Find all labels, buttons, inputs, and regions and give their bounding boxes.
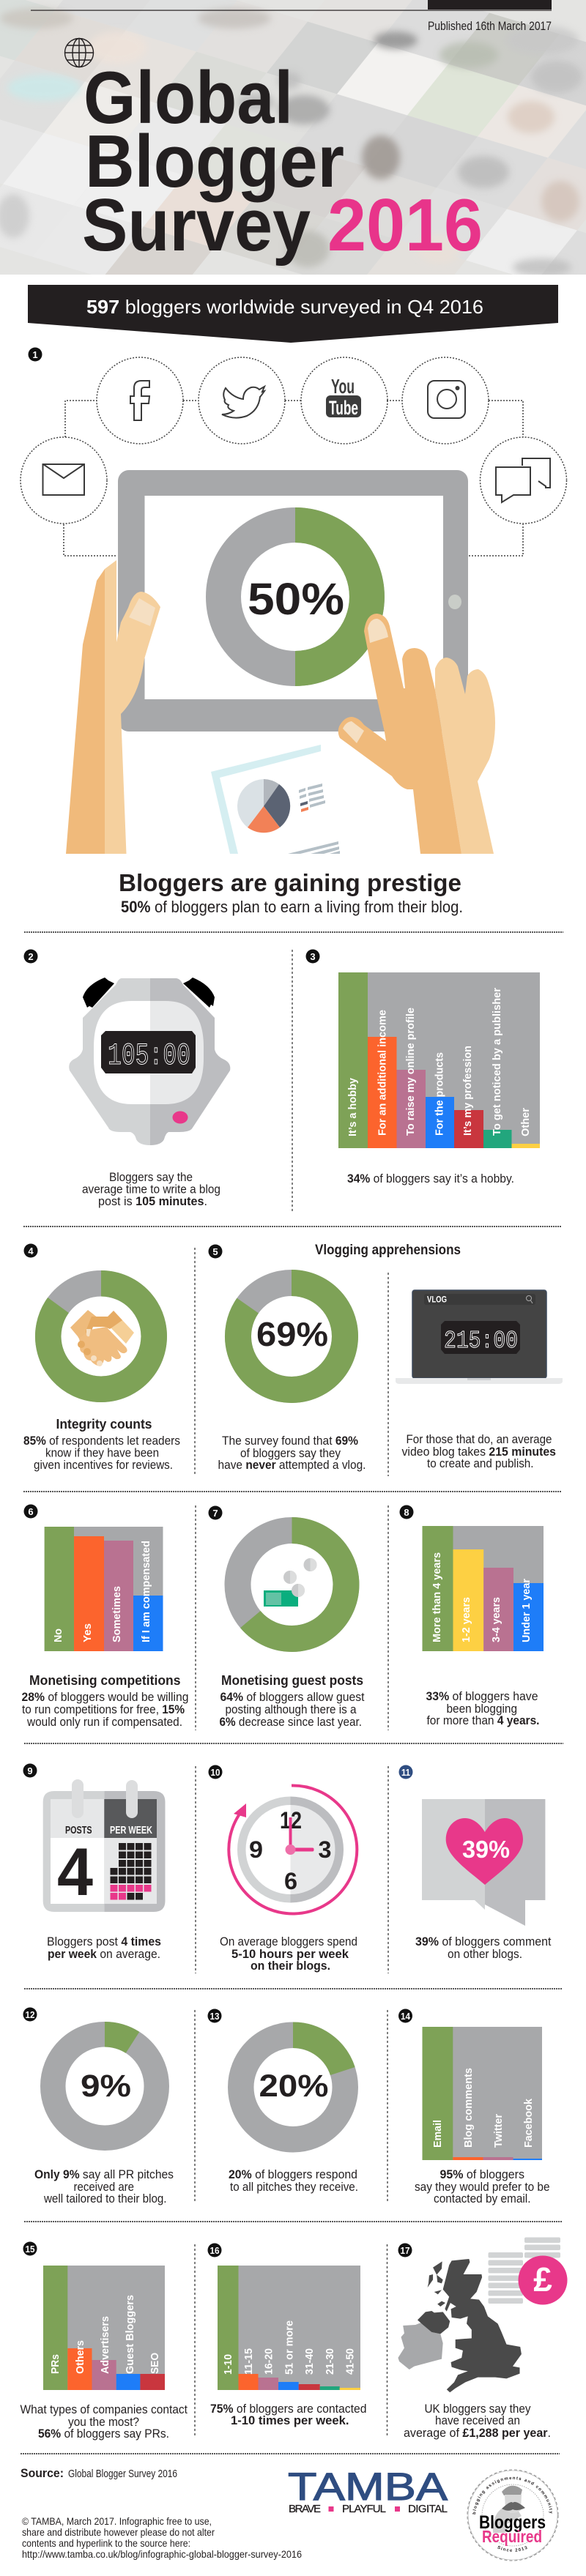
caption 5 [218, 1434, 366, 1472]
bar chart: competitions: No [53, 1628, 64, 1642]
number badge 12 [23, 2008, 37, 2021]
title [82, 57, 483, 267]
logo: Bloggers Required stamp [467, 2469, 558, 2561]
caption 13: to all pitches they receive. [230, 2181, 358, 2194]
bar chart: reasons [338, 972, 540, 1148]
panel 3: why bloggers blog [306, 949, 540, 1185]
number badge 17 [398, 2244, 412, 2257]
number badge 4: 4 [28, 1246, 34, 1257]
number badge 5 [208, 1245, 223, 1258]
icon: youtube [301, 357, 387, 444]
icon: calendar: 4 [57, 1835, 93, 1910]
bar chart: years: Under 1 year [521, 1579, 533, 1642]
sub-heading: 50% of bloggers plan to earn a living from their blog. [121, 898, 463, 916]
number badge 11: 11 [401, 1767, 410, 1778]
bar chart: competitions: Yes [82, 1623, 94, 1642]
caption 4: know if they have been [45, 1447, 159, 1460]
icon: speech bubble with heart: 39% [462, 1836, 510, 1863]
caption 14 [415, 2168, 549, 2205]
caption vlog time: video blog takes 215 minutes [401, 1445, 556, 1459]
number badge 4 [23, 1243, 38, 1258]
caption 10 [220, 1935, 357, 1973]
caption 16: 1-10 times per week. [231, 2414, 349, 2427]
donut chart: 50% [223, 525, 367, 669]
number badge 13: 13 [209, 2011, 220, 2022]
bar chart: reasons: To raise my online profile [405, 1008, 417, 1136]
icon: clock: 12 [280, 1807, 302, 1834]
bar chart: company types: Others [75, 2340, 86, 2374]
caption 3: 34% of bloggers say it’s a hobby. [347, 1172, 514, 1185]
panel 5: vlogging apprehensions [208, 1242, 563, 1472]
bar chart: years: More than 4 years [431, 1552, 443, 1642]
caption 8: for more than 4 years. [426, 1714, 539, 1727]
donut chart: 9%: 9% [81, 2069, 131, 2104]
panel 11: commenting [398, 1765, 552, 1961]
caption 17: have received an [435, 2414, 520, 2427]
bar chart: contact frequency: 51 or more [284, 2320, 296, 2375]
bar chart: reasons: For the products [434, 1052, 445, 1136]
logo: TAMBA: BRAVE [289, 2503, 321, 2515]
caption 7 [220, 1672, 365, 1729]
logo: Bloggers Required stamp: blogging assignments and community [472, 2476, 552, 2514]
caption 6 [22, 1672, 189, 1729]
bar chart: contact frequency: 21-30 [324, 2348, 336, 2375]
bar chart: reasons: For an additional income [377, 1010, 388, 1136]
bar chart: contact frequency: 16-20 [264, 2348, 275, 2375]
title: Blogger [85, 121, 344, 203]
panel 7: monetising guest posts [208, 1505, 365, 1729]
number badge 14: 14 [401, 2011, 411, 2022]
caption 15: 56% of bloggers say PRs. [38, 2427, 169, 2441]
number badge 13 [208, 2009, 221, 2022]
bar chart: contact frequency: 31-40 [304, 2348, 316, 2375]
copyright notice: © TAMBA, March 2017. Infographic free to use, [22, 2515, 212, 2527]
caption 12: Only 9% say all PR pitches [34, 2168, 174, 2181]
tablet [118, 470, 468, 732]
number badge 8: 8 [404, 1507, 409, 1518]
number badge 9: 9 [27, 1765, 33, 1776]
panel 15: who contacts bloggers [21, 2242, 188, 2441]
left hand [66, 560, 160, 854]
icon: pound coin [519, 2255, 567, 2305]
publication date: Published 16th March 2017 [428, 19, 552, 33]
panel 2: time to write a post [23, 949, 230, 1208]
panel 1: bloggers gaining prestige [21, 347, 567, 916]
caption 10: 5-10 hours per week [231, 1948, 349, 1961]
caption 11: 39% of bloggers comment [415, 1935, 552, 1948]
caption 4: Integrity counts [56, 1416, 152, 1432]
report page with pie chart [211, 745, 340, 854]
caption 12: received are [73, 2181, 134, 2194]
caption 11 [415, 1935, 552, 1961]
bar chart: company types: Guest Bloggers [125, 2295, 136, 2374]
icon: stopwatch: 105:00 [108, 1038, 190, 1073]
icon: twitter [199, 357, 285, 444]
header photo collage [0, 0, 586, 275]
number badge 7: 7 [212, 1508, 218, 1519]
icon: facebook [97, 357, 183, 444]
caption 8 [426, 1690, 539, 1727]
donut chart: 69% [238, 1283, 345, 1390]
number badge 16 [208, 2244, 221, 2257]
logo: TAMBA: PLAYFUL [342, 2503, 386, 2515]
bar chart: contact frequency: 41-50 [344, 2348, 356, 2375]
icon: email [21, 437, 107, 524]
number badge 2 [23, 949, 38, 964]
bar chart: years [422, 1526, 544, 1651]
logo: Bloggers Required stamp: Bloggers [479, 2512, 546, 2533]
map of the UK and Ireland [398, 2259, 522, 2392]
icon: money [264, 1558, 316, 1607]
number badge 1: 1 [32, 349, 38, 360]
social network connectors [64, 401, 523, 556]
heading: Bloggers are gaining prestige [119, 869, 461, 896]
bar chart: contact frequency: 1-10 [223, 2354, 234, 2375]
caption 4 [23, 1416, 180, 1472]
icon: clock: 3 [318, 1836, 331, 1863]
caption 12 [34, 2168, 174, 2205]
title: Global [84, 57, 293, 139]
banner: survey size: 597 bloggers worldwide surveyed in Q4 2016 [86, 296, 483, 318]
bar chart: company types [43, 2266, 165, 2390]
icon: clock: 6 [284, 1868, 297, 1894]
number badge 6: 6 [28, 1506, 34, 1517]
donut chart: 85% [48, 1284, 154, 1389]
caption 5: of bloggers say they [240, 1447, 341, 1460]
number badge 15 [23, 2242, 37, 2255]
bar chart: reasons: It’s my profession [462, 1046, 474, 1136]
panel 4: integrity counts [23, 1243, 180, 1472]
number badge 10: 10 [211, 1767, 220, 1778]
caption vlog time [401, 1433, 556, 1470]
donut chart: 20% [241, 2035, 345, 2140]
donut chart: 20%: 20% [259, 2069, 328, 2104]
icon: pound coin: £ [533, 2260, 552, 2298]
bar chart: years: 1-2 years [461, 1597, 472, 1642]
bar chart: company types: SEO [149, 2353, 161, 2374]
panel 12: tailored pitches [23, 2008, 174, 2205]
caption 7: 6% decrease since last year. [220, 1716, 362, 1729]
bar chart: contact frequency: 11-15 [243, 2348, 255, 2375]
bar chart: years: 3-4 years [491, 1597, 502, 1642]
bar chart: competitions [45, 1527, 163, 1651]
caption 17 [404, 2402, 551, 2440]
icon: youtube: You [331, 375, 355, 398]
source line: Global Blogger Survey 2016 [68, 2468, 177, 2480]
icon: laptop with timer: 215:00 [444, 1328, 518, 1355]
caption 7: Monetising guest posts [221, 1672, 363, 1688]
bar chart: contact [422, 2027, 542, 2160]
panel 8: years blogging [400, 1505, 544, 1727]
icon: clock: 9 [249, 1836, 263, 1863]
top rule and publication tab [31, 0, 552, 11]
donut chart: 69%: 69% [256, 1315, 328, 1353]
caption 13 [229, 2168, 358, 2194]
caption 5: The survey found that 69% [222, 1434, 358, 1448]
panel 14: contact preference [398, 2009, 549, 2205]
caption 2: Bloggers say the [109, 1171, 193, 1184]
bar chart: contact: Twitter [493, 2114, 505, 2148]
icon: youtube: Tube [329, 397, 358, 419]
heading: Vlogging apprehensions [315, 1242, 461, 1258]
bar chart: contact: Email [432, 2120, 444, 2148]
panel 6: monetising competitions [22, 1504, 189, 1729]
icon: instagram [402, 357, 489, 444]
caption 4: 85% of respondents let readers [23, 1434, 180, 1448]
bar chart: competitions: If I am compensated [141, 1541, 152, 1642]
caption 14: contacted by email. [434, 2192, 530, 2205]
caption 6: Monetising competitions [29, 1672, 180, 1688]
caption 2: average time to write a blog [82, 1183, 220, 1196]
logo: Bloggers Required stamp: Since 2013 [497, 2545, 527, 2552]
caption 11: on other blogs. [448, 1948, 522, 1961]
number badge 2: 2 [28, 951, 34, 962]
panel 9: posts per week [23, 1763, 166, 1961]
number badge 16: 16 [209, 2245, 220, 2256]
number badge 11 [398, 1765, 413, 1779]
number badge 8 [400, 1505, 413, 1519]
number badge 6 [23, 1504, 38, 1519]
caption 9 [47, 1935, 161, 1961]
logo: TAMBA: DIGITAL [408, 2503, 448, 2515]
number badge 7 [208, 1505, 223, 1520]
panel 17: UK earnings [398, 2238, 567, 2440]
right hand [338, 614, 495, 854]
bar chart: reasons: To get noticed by a publisher [492, 988, 503, 1136]
caption 14: say they would prefer to be [415, 2181, 549, 2194]
caption 15: What types of companies contact [21, 2403, 188, 2416]
bar chart: reasons: It’s a hobby [347, 1078, 359, 1136]
copyright notice: share and distribute however please do not alter [22, 2526, 215, 2538]
icon: laptop with timer: VLOG [427, 1295, 447, 1305]
logo: Bloggers Required stamp: Required [482, 2527, 542, 2546]
caption 6: to run competitions for free, 15% [22, 1703, 185, 1716]
caption vlog time: For those that do, an average [406, 1433, 552, 1446]
caption 13: 20% of bloggers respond [229, 2168, 357, 2181]
copyright notice: contents and hyperlink to the source here: [22, 2537, 190, 2549]
stacked coin bars [488, 2238, 560, 2304]
icon: stopwatch [69, 978, 230, 1145]
number badge 3: 3 [310, 951, 316, 962]
logo: TAMBA: TAMBA [288, 2465, 448, 2509]
number badge 12: 12 [25, 2009, 35, 2020]
icon: calendar [43, 1779, 166, 1912]
source line [21, 2466, 177, 2480]
panel 16: contact frequency [208, 2244, 366, 2427]
caption 7: posting although there is a [226, 1703, 357, 1716]
caption 15: you the most? [68, 2416, 139, 2429]
caption 17: average of £1,288 per year. [404, 2427, 551, 2440]
caption 4: given incentives for reviews. [34, 1459, 173, 1472]
number badge 1 [28, 347, 42, 362]
caption 8: been blogging [447, 1702, 517, 1716]
caption 7: 64% of bloggers allow guest [220, 1691, 365, 1704]
copyright notice [22, 2515, 302, 2560]
bar chart: company types: PRs [50, 2354, 62, 2374]
icon: calendar: POSTS [65, 1825, 92, 1836]
caption 16 [210, 2402, 366, 2427]
panel 13: pitch response [208, 2009, 358, 2194]
icon: clock [229, 1785, 357, 1913]
source line: Source: [21, 2466, 64, 2480]
bar chart: reasons: Other [520, 1108, 532, 1136]
bar chart: competitions: Sometimes [111, 1586, 123, 1642]
caption 12: well tailored to their blog. [43, 2192, 166, 2205]
icon: laptop with timer [396, 1290, 563, 1384]
caption 9: Bloggers post 4 times [47, 1935, 161, 1948]
bar chart: company types: Advertisers [100, 2316, 111, 2374]
caption 6: would only run if compensated. [26, 1716, 182, 1729]
number badge 14 [398, 2009, 412, 2022]
caption 10: On average bloggers spend [220, 1935, 357, 1948]
caption 17: UK bloggers say they [425, 2402, 531, 2416]
donut chart: 9% [53, 2034, 157, 2138]
title: Survey [82, 185, 311, 267]
number badge 9 [23, 1763, 37, 1778]
number badge 5: 5 [212, 1246, 218, 1257]
caption 8: 33% of bloggers have [426, 1690, 538, 1703]
bar chart: contact frequency [218, 2266, 360, 2390]
caption 2 [82, 1171, 220, 1208]
caption 15 [21, 2403, 188, 2441]
icon: comments [481, 437, 567, 524]
caption 5: have never attempted a vlog. [218, 1459, 366, 1472]
caption 2: post is 105 minutes. [98, 1195, 207, 1208]
caption vlog time: to create and publish. [427, 1457, 533, 1470]
caption 16: 75% of bloggers are contacted [210, 2402, 366, 2416]
banner: survey size [28, 285, 558, 343]
panel 10: hours per week [208, 1765, 357, 1973]
bar chart: contact: Blog comments [463, 2068, 475, 2148]
caption 6: 28% of bloggers would be willing [22, 1691, 189, 1704]
caption 14: 95% of bloggers [440, 2168, 524, 2181]
bar chart: contact: Facebook [523, 2098, 535, 2148]
number badge 3 [306, 949, 319, 964]
title: 2016 [327, 185, 483, 267]
caption 9: per week on average. [48, 1948, 160, 1961]
number badge 15: 15 [25, 2244, 35, 2255]
donut chart: 64% [237, 1530, 346, 1639]
icon: speech bubble with heart [422, 1799, 545, 1926]
copyright notice: http://www.tamba.co.uk/blog/infographic-global-blogger-survey-2016 [22, 2548, 302, 2560]
icon: handshake [70, 1310, 134, 1366]
icon: calendar: PER WEEK [110, 1825, 152, 1836]
caption 10: on their blogs. [251, 1959, 330, 1973]
icon: globe [64, 38, 94, 67]
number badge 10 [208, 1765, 223, 1779]
donut chart: 50%: 50% [248, 574, 344, 624]
number badge 17: 17 [400, 2245, 410, 2256]
